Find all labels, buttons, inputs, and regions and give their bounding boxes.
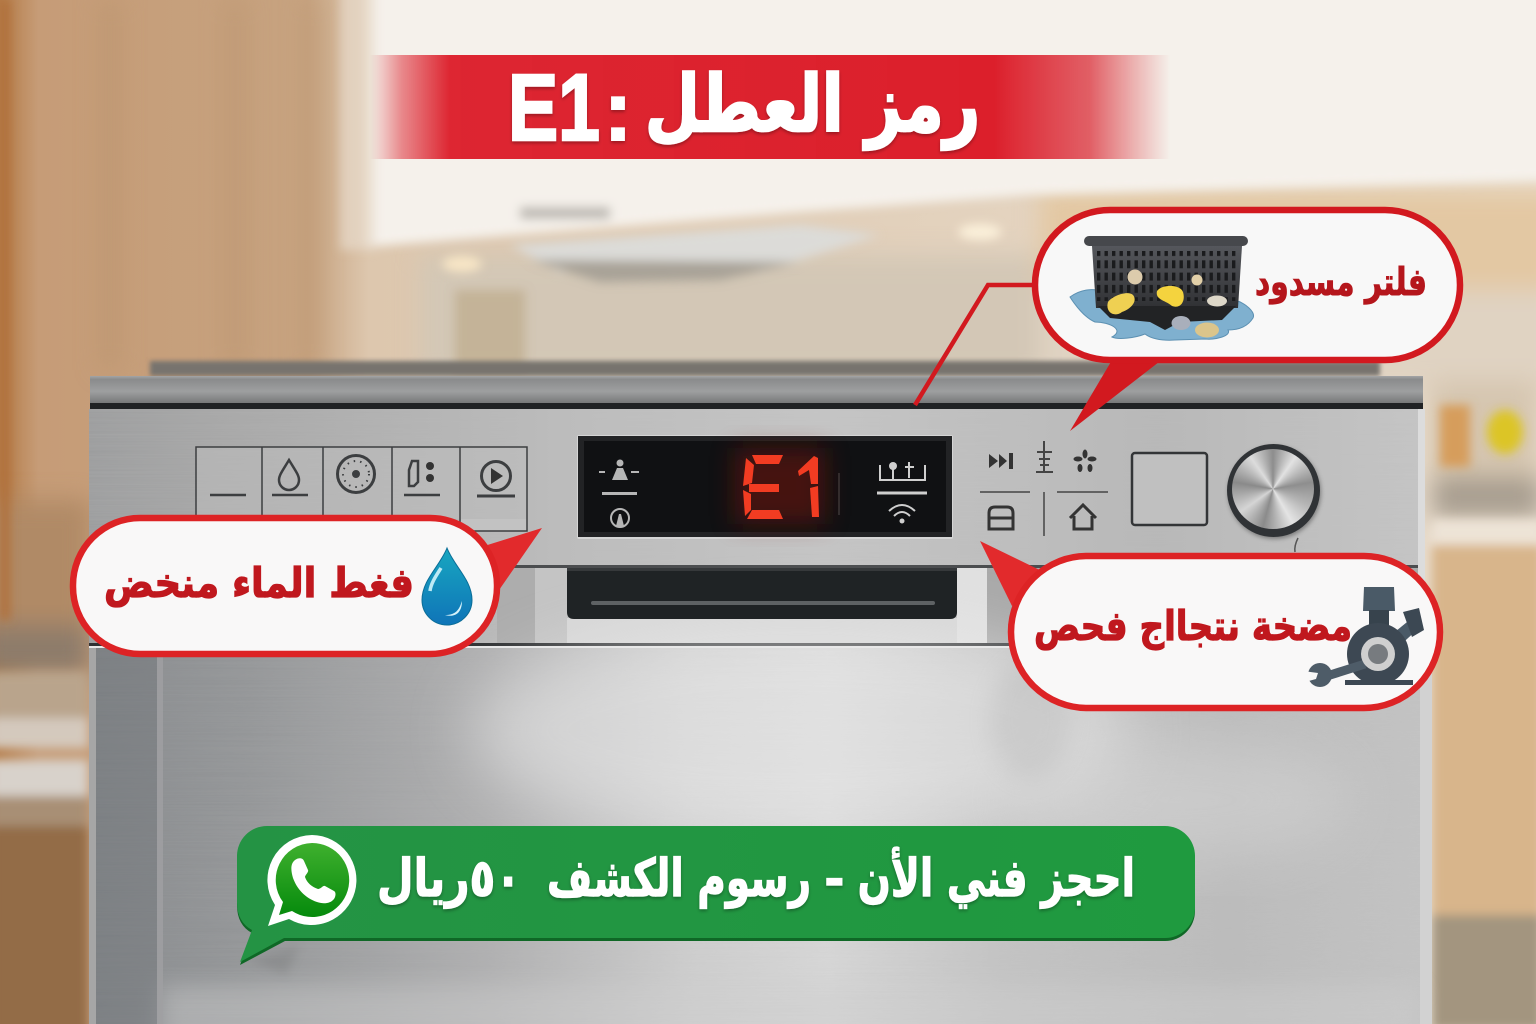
icon: clogged basket filter	[1070, 236, 1254, 340]
icon: dash button	[210, 494, 246, 496]
callout: clogged filter	[915, 210, 1460, 431]
icon: detergent button	[404, 461, 440, 495]
display right icons	[877, 462, 927, 524]
door handle recess	[567, 568, 957, 619]
icon: WhatsApp logo	[267, 835, 356, 926]
callout text: فغط الماء منخض	[104, 559, 414, 607]
title text: E1	[508, 55, 600, 161]
dishwasher top strip	[90, 361, 1423, 409]
banner text: ٥٠ريال	[377, 849, 521, 909]
display left icons	[599, 460, 639, 527]
icon: play button	[477, 462, 515, 496]
icon: water drop	[422, 548, 472, 625]
title ribbon	[370, 55, 1170, 161]
callout: low water pressure	[73, 518, 542, 654]
title text: رمز العطل	[645, 60, 980, 150]
icon: water drop button	[272, 460, 308, 495]
right control icons	[980, 441, 1108, 536]
knob cable	[1295, 538, 1298, 552]
LED display	[577, 435, 953, 539]
square button	[1132, 453, 1207, 525]
call to action banner	[237, 826, 1195, 975]
control panel body	[89, 409, 1425, 646]
dishwasher	[89, 361, 1432, 1024]
title text	[508, 55, 980, 161]
callout: check pump	[980, 541, 1440, 708]
door panel	[89, 620, 1432, 1024]
seven segment E1	[735, 448, 825, 524]
left button row	[196, 447, 527, 531]
callout text: مضخة نتجااج فحص	[1034, 602, 1352, 650]
icon: pump and wrench	[1303, 587, 1424, 687]
banner text: احجز فني الأن – رسوم الكشف	[547, 846, 1135, 909]
banner text	[377, 846, 1135, 909]
control knob	[1227, 444, 1320, 537]
icon: dial button	[338, 456, 374, 492]
callout text: فلتر مسدود	[1255, 260, 1427, 305]
title text: :	[604, 64, 632, 158]
